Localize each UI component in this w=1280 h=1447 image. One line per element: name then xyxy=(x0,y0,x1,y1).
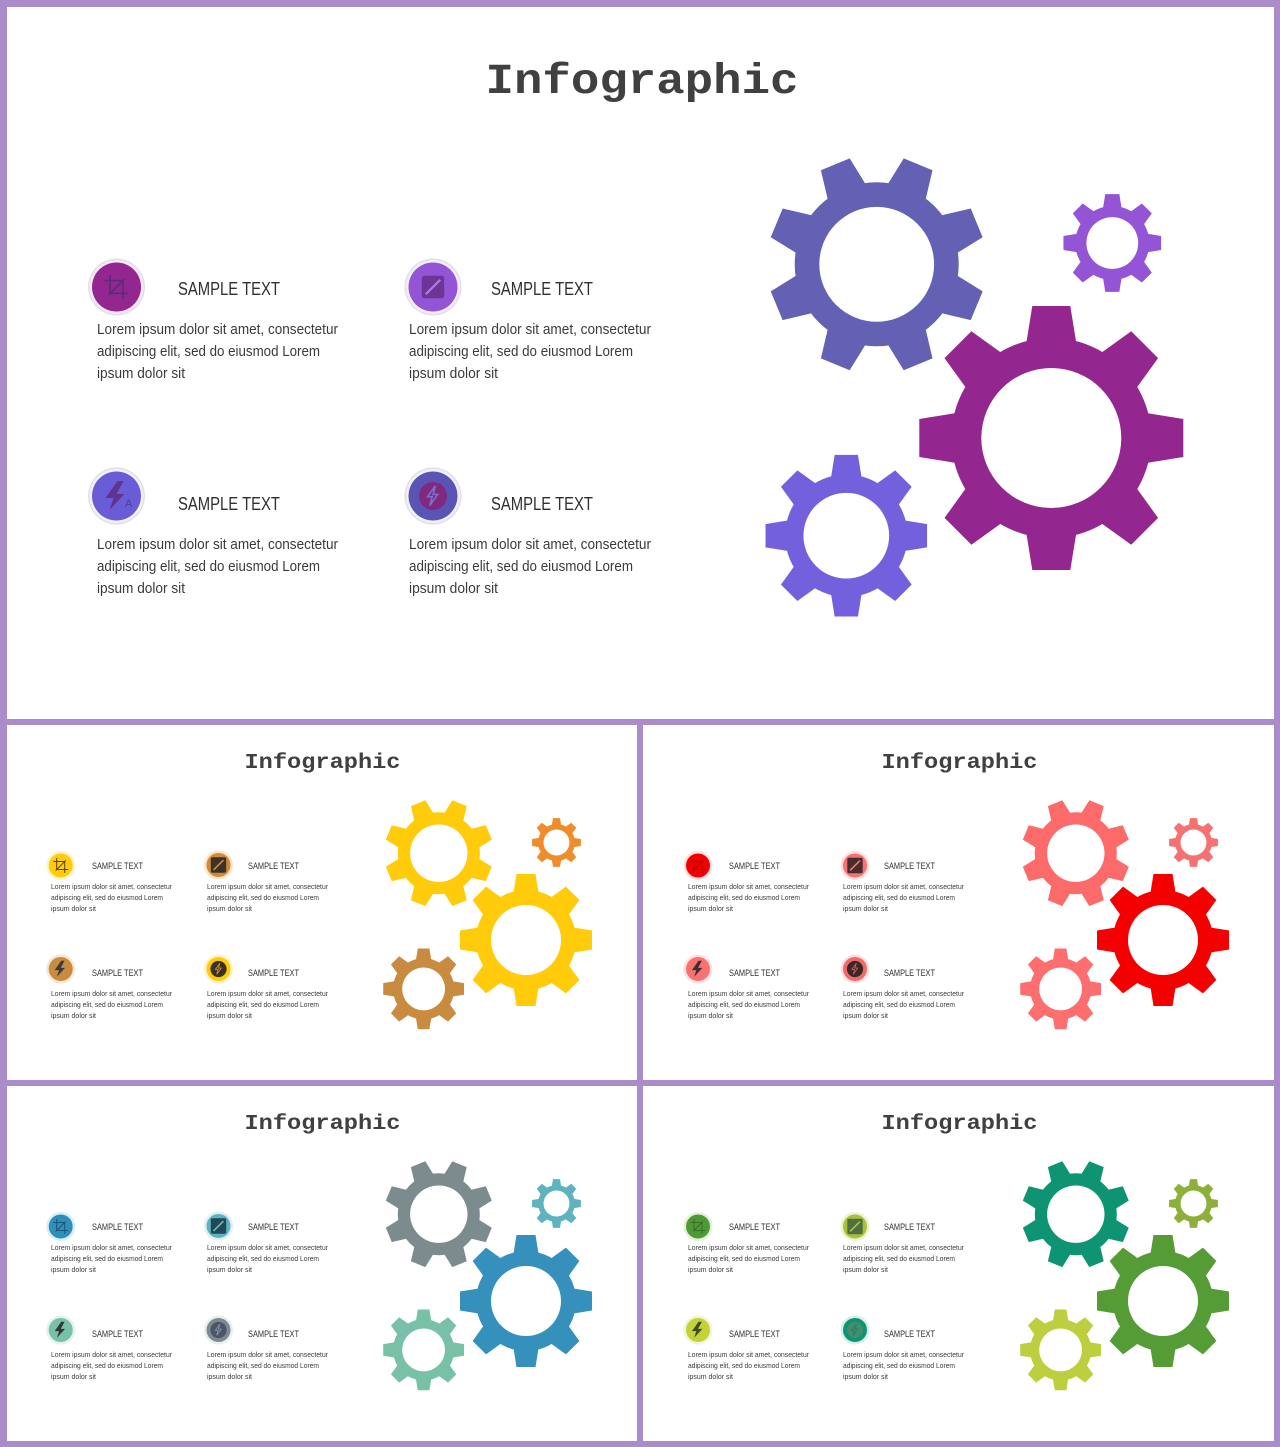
icon: circled bolt xyxy=(840,1316,870,1344)
icon: lightning: A xyxy=(125,498,133,510)
item heading 1: SAMPLE TEXT xyxy=(729,861,780,871)
item body 2: Lorem ipsum dolor sit amet, consectetur xyxy=(207,882,328,891)
gear: small orange xyxy=(532,818,581,867)
icon: lightning xyxy=(684,1316,712,1344)
item body 4: Lorem ipsum dolor sit amet, consectetur xyxy=(843,989,964,998)
icon: diagonal square xyxy=(840,851,870,880)
item body 4 xyxy=(207,1350,328,1381)
item body 4: Lorem ipsum dolor sit amet, consectetur xyxy=(207,989,328,998)
panel: main purple infographic xyxy=(7,7,1274,719)
gear: small olive xyxy=(1169,1179,1218,1228)
item body 4: adipiscing elit, sed do eiusmod Lorem xyxy=(843,1361,955,1370)
item heading 2: SAMPLE TEXT xyxy=(491,279,593,299)
item body 3: adipiscing elit, sed do eiusmod Lorem xyxy=(688,1000,800,1009)
icon: diagonal square xyxy=(204,850,233,880)
item body 1: adipiscing elit, sed do eiusmod Lorem xyxy=(51,1254,163,1263)
item body 2: ipsum dolor sit xyxy=(207,1265,253,1274)
gear: large green xyxy=(1097,1235,1229,1367)
icon: crop xyxy=(46,851,75,880)
item body 4: adipiscing elit, sed do eiusmod Lorem xyxy=(207,1000,319,1009)
item body 3: Lorem ipsum dolor sit amet, consectetur xyxy=(688,989,809,998)
item body 2: adipiscing elit, sed do eiusmod Lorem xyxy=(207,1254,319,1263)
item body 2: Lorem ipsum dolor sit amet, consectetur xyxy=(409,321,651,338)
item body 1: Lorem ipsum dolor sit amet, consectetur xyxy=(688,882,809,891)
item body 2: adipiscing elit, sed do eiusmod Lorem xyxy=(843,893,955,902)
item body 1: Lorem ipsum dolor sit amet, consectetur xyxy=(51,1243,172,1252)
item body 4: ipsum dolor sit xyxy=(207,1011,253,1020)
item body 4: ipsum dolor sit xyxy=(843,1372,889,1381)
item body 2: adipiscing elit, sed do eiusmod Lorem xyxy=(409,343,633,360)
panel: red variant xyxy=(643,725,1274,1080)
item heading 4: SAMPLE TEXT xyxy=(491,494,593,514)
item body 3: Lorem ipsum dolor sit amet, consectetur xyxy=(51,1350,172,1359)
item body 4 xyxy=(843,989,964,1020)
icon: diagonal square xyxy=(404,258,462,316)
item body 1 xyxy=(97,321,338,382)
item body 3 xyxy=(97,536,338,597)
panel: yellow variant xyxy=(7,725,637,1080)
item body 4 xyxy=(207,989,328,1020)
gear: lower seafoam xyxy=(383,1310,464,1390)
gear: upper emerald xyxy=(1005,1143,1147,1285)
gear: upper coral xyxy=(1005,782,1147,924)
item body 2 xyxy=(207,1243,328,1274)
item heading 1: SAMPLE TEXT xyxy=(92,861,143,871)
item body 1: ipsum dolor sit xyxy=(51,1265,97,1274)
item body 1: ipsum dolor sit xyxy=(51,904,97,913)
item body 4: Lorem ipsum dolor sit amet, consectetur xyxy=(409,536,651,553)
item body 2: adipiscing elit, sed do eiusmod Lorem xyxy=(207,893,319,902)
gear: small violet xyxy=(1063,194,1161,292)
item body 1 xyxy=(688,882,809,913)
item body 1: adipiscing elit, sed do eiusmod Lorem xyxy=(51,893,163,902)
item body 2: adipiscing elit, sed do eiusmod Lorem xyxy=(843,1254,955,1263)
item body 4: adipiscing elit, sed do eiusmod Lorem xyxy=(843,1000,955,1009)
gear cluster xyxy=(368,1143,592,1390)
gear: lower indigo xyxy=(766,455,927,616)
item body 1: ipsum dolor sit xyxy=(97,365,186,382)
item heading 3: SAMPLE TEXT xyxy=(92,1329,143,1339)
item body 3: Lorem ipsum dolor sit amet, consectetur xyxy=(688,1350,809,1359)
icon: diagonal square xyxy=(204,1212,233,1240)
icon: crop xyxy=(46,1212,75,1241)
gear cluster xyxy=(1005,1143,1229,1390)
icon: crop xyxy=(88,258,145,316)
icon: diagonal square xyxy=(840,1212,870,1241)
item heading 1: SAMPLE TEXT xyxy=(92,1222,143,1232)
icon: crop xyxy=(684,1212,712,1241)
icon: crop xyxy=(684,851,712,880)
gear cluster xyxy=(1005,782,1229,1029)
item heading 1: SAMPLE TEXT xyxy=(729,1222,780,1232)
gear cluster xyxy=(368,782,592,1029)
gear: upper blue xyxy=(735,123,1018,406)
item body 1: ipsum dolor sit xyxy=(688,1265,734,1274)
item heading 3: SAMPLE TEXT xyxy=(729,1329,780,1339)
gear: lower lime xyxy=(1020,1310,1101,1390)
item body 2 xyxy=(843,882,964,913)
item body 3: adipiscing elit, sed do eiusmod Lorem xyxy=(51,1361,163,1370)
panel: green variant xyxy=(643,1086,1274,1441)
item body 1: Lorem ipsum dolor sit amet, consectetur xyxy=(97,321,338,338)
item body 2: Lorem ipsum dolor sit amet, consectetur xyxy=(843,1243,964,1252)
icon: circled bolt xyxy=(204,1316,233,1344)
item body 2: ipsum dolor sit xyxy=(843,904,889,913)
item heading 4: SAMPLE TEXT xyxy=(884,1329,935,1339)
item body 1: ipsum dolor sit xyxy=(688,904,734,913)
icon: lightning xyxy=(46,1316,75,1344)
item body 4: Lorem ipsum dolor sit amet, consectetur xyxy=(843,1350,964,1359)
item body 2: Lorem ipsum dolor sit amet, consectetur xyxy=(843,882,964,891)
item heading 2: SAMPLE TEXT xyxy=(248,861,299,871)
item body 3 xyxy=(688,989,809,1020)
item heading 4: SAMPLE TEXT xyxy=(248,1329,299,1339)
item heading 3: SAMPLE TEXT xyxy=(92,968,143,978)
item body 4 xyxy=(843,1350,964,1381)
item body 1: Lorem ipsum dolor sit amet, consectetur xyxy=(688,1243,809,1252)
gear: large red xyxy=(1097,874,1229,1006)
item body 3: ipsum dolor sit xyxy=(51,1011,97,1020)
item body 3 xyxy=(51,1350,172,1381)
item body 4: ipsum dolor sit xyxy=(843,1011,889,1020)
icon: circled bolt xyxy=(404,468,462,524)
gear: large yellow xyxy=(460,874,592,1006)
title: Infographic xyxy=(486,57,798,106)
item body 1: adipiscing elit, sed do eiusmod Lorem xyxy=(97,343,320,360)
item body 4: adipiscing elit, sed do eiusmod Lorem xyxy=(207,1361,319,1370)
item heading 4: SAMPLE TEXT xyxy=(248,968,299,978)
item body 3: adipiscing elit, sed do eiusmod Lorem xyxy=(51,1000,163,1009)
item body 3: ipsum dolor sit xyxy=(51,1372,97,1381)
item heading 2: SAMPLE TEXT xyxy=(884,1222,935,1232)
item body 4: adipiscing elit, sed do eiusmod Lorem xyxy=(409,558,633,575)
icon: lightning xyxy=(88,468,145,524)
title: Infographic xyxy=(882,751,1038,775)
item body 1: adipiscing elit, sed do eiusmod Lorem xyxy=(688,893,800,902)
item body 3: adipiscing elit, sed do eiusmod Lorem xyxy=(97,558,320,575)
item body 1: adipiscing elit, sed do eiusmod Lorem xyxy=(688,1254,800,1263)
item body 3: ipsum dolor sit xyxy=(97,580,186,597)
item body 3: ipsum dolor sit xyxy=(688,1372,734,1381)
item body 2: ipsum dolor sit xyxy=(843,1265,889,1274)
item body 1: Lorem ipsum dolor sit amet, consectetur xyxy=(51,882,172,891)
gear: upper yellow xyxy=(368,782,510,924)
item body 3: adipiscing elit, sed do eiusmod Lorem xyxy=(688,1361,800,1370)
item body 2 xyxy=(207,882,328,913)
item body 2 xyxy=(843,1243,964,1274)
icon: circled bolt xyxy=(204,954,233,984)
title: Infographic xyxy=(244,751,400,775)
item body 1 xyxy=(51,1243,172,1274)
item body 1 xyxy=(51,882,172,913)
item body 2: Lorem ipsum dolor sit amet, consectetur xyxy=(207,1243,328,1252)
item body 2: ipsum dolor sit xyxy=(409,365,499,382)
gear cluster xyxy=(735,123,1183,616)
item body 2 xyxy=(409,321,651,382)
item body 4: ipsum dolor sit xyxy=(409,580,499,597)
gear: small teal xyxy=(532,1179,581,1228)
item body 3: ipsum dolor sit xyxy=(688,1011,734,1020)
gear: lower ochre xyxy=(383,949,464,1029)
item heading 3: SAMPLE TEXT xyxy=(178,494,280,514)
item heading 2: SAMPLE TEXT xyxy=(248,1222,299,1232)
title: Infographic xyxy=(244,1112,400,1136)
item body 4: ipsum dolor sit xyxy=(207,1372,253,1381)
icon: lightning xyxy=(46,954,75,984)
gear: lower coral xyxy=(1020,949,1101,1029)
item heading 3: SAMPLE TEXT xyxy=(729,968,780,978)
icon: lightning xyxy=(684,954,712,984)
item heading 1: SAMPLE TEXT xyxy=(178,279,280,299)
gear: large magenta xyxy=(919,306,1183,570)
item body 4: Lorem ipsum dolor sit amet, consectetur xyxy=(207,1350,328,1359)
item body 1 xyxy=(688,1243,809,1274)
item body 3: Lorem ipsum dolor sit amet, consectetur xyxy=(51,989,172,998)
item heading 2: SAMPLE TEXT xyxy=(884,861,935,871)
item body 3 xyxy=(51,989,172,1020)
panel: blue variant xyxy=(7,1086,637,1441)
gear: small coral xyxy=(1169,818,1218,867)
gear: upper slate xyxy=(368,1143,510,1285)
item body 4 xyxy=(409,536,651,597)
gear: large blue xyxy=(460,1235,592,1367)
item body 3 xyxy=(688,1350,809,1381)
item body 3: Lorem ipsum dolor sit amet, consectetur xyxy=(97,536,338,553)
icon: circled bolt xyxy=(840,954,870,984)
item heading 4: SAMPLE TEXT xyxy=(884,968,935,978)
title: Infographic xyxy=(882,1112,1038,1136)
item body 2: ipsum dolor sit xyxy=(207,904,253,913)
